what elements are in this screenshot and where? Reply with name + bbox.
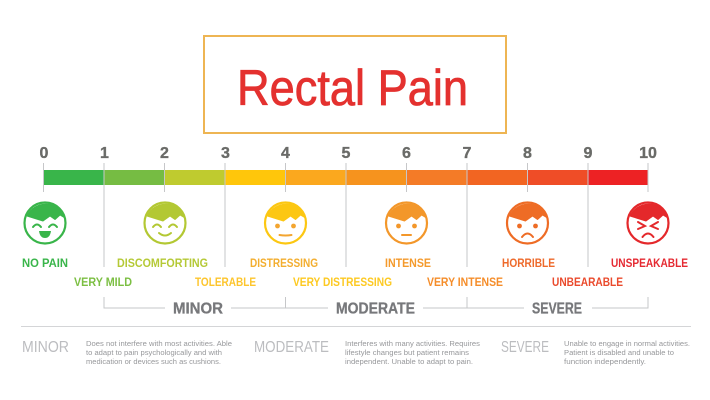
- face: intense: [386, 202, 427, 244]
- face: no pain: [24, 202, 66, 244]
- pain scale numbers: 7: [463, 145, 472, 162]
- legend: moderate: lifestyle changes but patient remains: [345, 348, 469, 357]
- pain scale numbers: 10: [639, 145, 657, 162]
- tick lines: [44, 163, 648, 267]
- pain labels: UNSPEAKABLE: [611, 258, 688, 270]
- face: horrible: [507, 202, 548, 244]
- pain labels: VERY INTENSE: [427, 277, 503, 289]
- legend: minor: to adapt to pain psychologically and with: [86, 348, 222, 357]
- severity brackets: SEVERE: [532, 300, 582, 318]
- legend: severe: Unable to engage in normal activities.: [564, 339, 690, 348]
- severity brackets: [104, 297, 648, 318]
- pain scale numbers: 6: [402, 145, 411, 162]
- pain scale numbers: 2: [160, 145, 169, 162]
- colour scale bar: [44, 170, 648, 185]
- pain labels: UNBEARABLE: [552, 277, 623, 289]
- pain scale numbers: 3: [221, 145, 230, 162]
- face: discomforting: [144, 202, 186, 244]
- pain labels: VERY MILD: [74, 277, 132, 289]
- pain labels: VERY DISTRESSING: [293, 277, 392, 289]
- pain scale numbers: 0: [40, 145, 49, 162]
- face: distressing: [265, 202, 306, 244]
- pain scale numbers: 4: [281, 145, 290, 162]
- legend panel: [21, 326, 691, 366]
- legend: severe: SEVERE: [501, 339, 549, 356]
- face: unspeakable: [628, 202, 668, 244]
- pain scale numbers: 9: [584, 145, 593, 162]
- legend: moderate: [254, 339, 480, 366]
- legend: severe: Patient is disabled and unable to: [564, 348, 674, 357]
- pain scale numbers: 8: [523, 145, 532, 162]
- pain labels: TOLERABLE: [195, 277, 256, 289]
- pain labels: [22, 258, 688, 289]
- pain labels: NO PAIN: [22, 258, 68, 270]
- pain scale numbers: 1: [100, 145, 109, 162]
- pain labels: DISCOMFORTING: [117, 258, 208, 270]
- severity brackets: MODERATE: [336, 300, 415, 318]
- legend: minor: MINOR: [22, 339, 69, 356]
- title: Rectal Pain: [237, 60, 468, 116]
- legend: moderate: Interferes with many activities. Requires: [345, 339, 480, 348]
- pain scale numbers: 5: [342, 145, 351, 162]
- pain labels: HORRIBLE: [502, 258, 555, 270]
- legend: severe: [501, 339, 690, 366]
- legend: moderate: independent. Unable to adapt to pain.: [345, 357, 473, 366]
- pain scale numbers: [40, 145, 657, 162]
- legend: minor: [22, 339, 232, 366]
- pain labels: DISTRESSING: [250, 258, 318, 270]
- pain labels: INTENSE: [385, 258, 431, 270]
- legend: minor: Does not interfere with most activities. Able: [86, 339, 232, 348]
- legend: minor: medication or devices such as cushions.: [86, 357, 221, 366]
- severity brackets: MINOR: [173, 300, 223, 318]
- legend: severe: function independently.: [564, 357, 646, 366]
- title box: [204, 36, 506, 133]
- legend: moderate: MODERATE: [254, 339, 329, 356]
